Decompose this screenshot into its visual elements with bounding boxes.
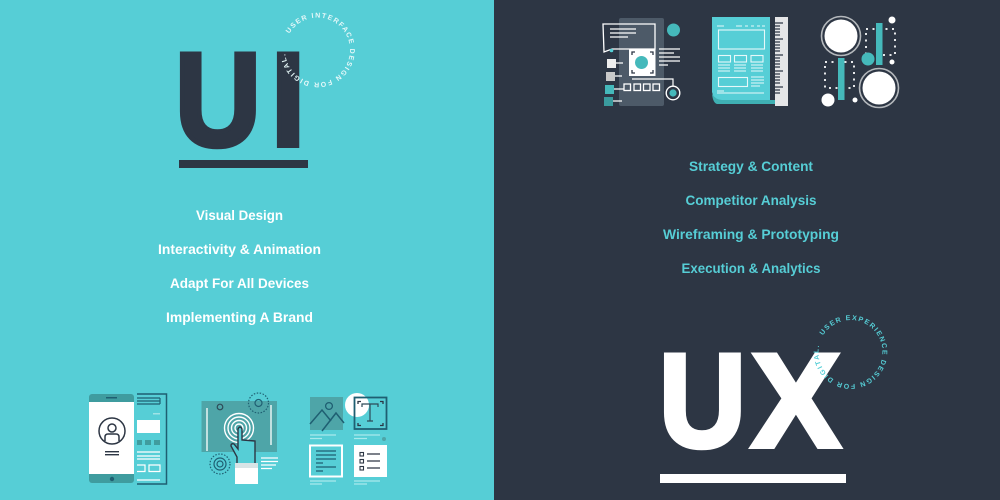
bottom knob	[860, 68, 898, 108]
icon: wireframe document and ruler	[712, 17, 788, 106]
letter U: U	[659, 326, 746, 475]
letter I: I	[271, 26, 305, 175]
left nodes	[604, 59, 624, 106]
right slider track	[876, 23, 882, 65]
left slider track	[838, 58, 844, 100]
ruler	[775, 17, 788, 106]
UI title	[175, 25, 308, 175]
layout lines	[717, 26, 765, 93]
top knob	[822, 16, 860, 56]
list item: Wireframing & Prototyping	[663, 226, 839, 242]
list item: Implementing A Brand	[166, 309, 313, 325]
page curl	[712, 94, 776, 104]
backing panel	[619, 18, 664, 106]
caption lines	[261, 458, 278, 468]
UX title	[659, 326, 846, 483]
white circle	[345, 393, 369, 417]
checklist card	[354, 445, 387, 484]
UI circular caption: USER INTERFACE DESIGN FOR DIGITAL.	[282, 12, 355, 88]
phone	[89, 394, 134, 483]
small dot	[610, 49, 613, 52]
teal circle	[667, 24, 680, 36]
icon: sliders	[822, 16, 898, 108]
cuff	[235, 463, 258, 484]
focus card	[629, 49, 656, 76]
icon: touch interaction	[202, 393, 278, 484]
dotted target top	[248, 393, 268, 413]
list item: Visual Design	[196, 207, 283, 223]
text lines	[659, 49, 680, 65]
UX list	[663, 158, 839, 276]
paper	[712, 17, 770, 102]
icon: phone and wireframe	[89, 394, 166, 484]
list item: Execution & Analytics	[682, 260, 821, 276]
list item: Competitor Analysis	[686, 192, 817, 208]
icon: interface flow	[603, 18, 680, 106]
icon: content cards	[310, 393, 387, 484]
letter X: X	[752, 328, 840, 476]
panel: UI background	[0, 0, 494, 500]
type card	[354, 398, 386, 441]
screen side lines	[207, 405, 271, 451]
UX underline	[660, 474, 846, 483]
document card	[310, 446, 342, 484]
touch ripples	[224, 414, 254, 442]
white dots	[822, 16, 896, 106]
wireframe	[137, 394, 166, 484]
connector	[632, 79, 673, 86]
bubble lines	[610, 29, 636, 37]
hand	[231, 427, 255, 463]
small circle	[217, 404, 223, 410]
dotted boxes	[825, 29, 895, 88]
end node	[666, 86, 680, 100]
teal dot	[862, 52, 874, 66]
list item: Interactivity & Animation	[158, 241, 321, 257]
UI list	[158, 207, 321, 325]
step boxes	[624, 84, 660, 90]
panel: UX background	[494, 0, 1000, 500]
screen	[202, 401, 277, 452]
UI underline	[179, 160, 308, 168]
list item: Strategy & Content	[689, 158, 813, 174]
speech bubble	[603, 24, 655, 52]
UX circular caption: USER EXPERIENCE DESIGN FOR DIGITAL.	[814, 315, 888, 389]
dotted target bottom	[210, 454, 230, 474]
letter U: U	[175, 25, 261, 174]
image card	[310, 397, 344, 438]
list item: Adapt For All Devices	[170, 275, 309, 291]
